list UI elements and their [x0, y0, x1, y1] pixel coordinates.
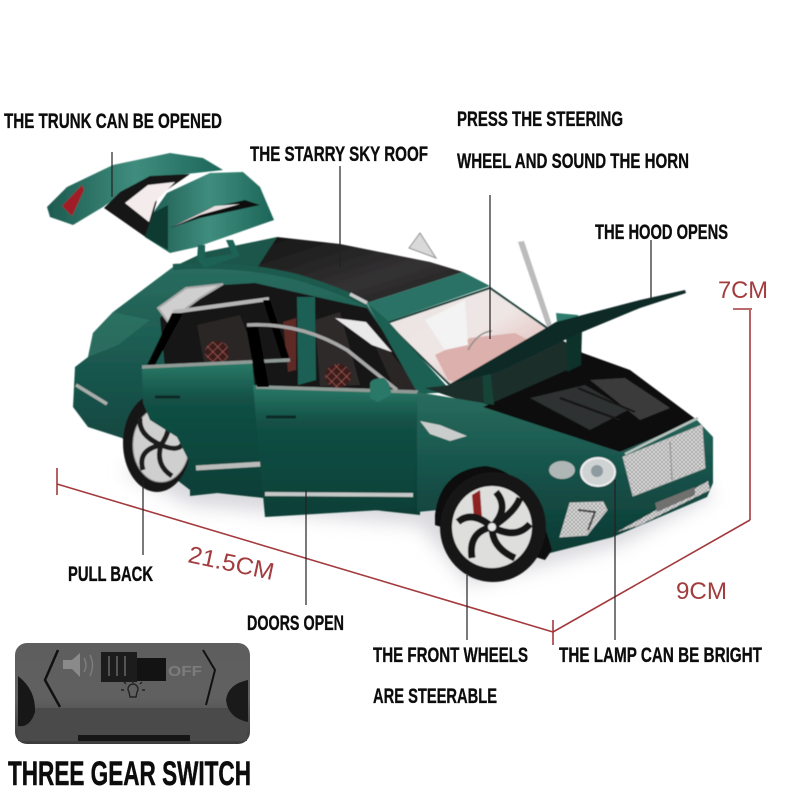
open far door glass [518, 241, 552, 330]
rear window [125, 182, 175, 222]
bay rim [625, 418, 698, 454]
bulb icon [121, 680, 145, 697]
rear window frame [104, 174, 190, 238]
speaker icon [63, 653, 80, 677]
label: pull back: PULL BACK [68, 563, 153, 586]
rear door handle [155, 396, 180, 398]
knob ridges [109, 656, 125, 676]
rear bumper strip [76, 385, 107, 404]
rear door [142, 362, 265, 496]
intake icon [578, 510, 595, 530]
left fog intake [560, 502, 607, 537]
brake caliper [472, 490, 482, 518]
front door handle [266, 416, 296, 418]
small headlamp [549, 461, 575, 479]
hood strut right [566, 330, 582, 372]
dimension: width: 9CM [676, 578, 727, 605]
rear door sill strip [196, 464, 263, 468]
engine cover right [590, 378, 670, 420]
ground shadow [120, 440, 715, 585]
shell shade [145, 205, 168, 250]
open hood [450, 290, 686, 384]
lower ledge [18, 708, 247, 741]
red dimension lines [57, 309, 752, 645]
pink interior [435, 333, 532, 384]
front door window frame [247, 325, 397, 390]
tail light [62, 185, 84, 216]
steering wheel [468, 331, 492, 350]
leader lines [112, 152, 651, 640]
front door sill strip [265, 494, 413, 495]
rear seat quilting [205, 341, 229, 363]
rear quarter window [158, 284, 223, 322]
rear wheel rim [133, 408, 189, 482]
green roof front band [367, 272, 490, 322]
rim spokes [140, 413, 184, 476]
glass highlight [172, 204, 240, 227]
label: roof: THE STARRY SKY ROOF [250, 143, 428, 166]
rear wheel tyre [123, 394, 191, 492]
strut [197, 240, 240, 268]
panel: switch photo [15, 643, 250, 744]
fender vent [420, 421, 467, 441]
label: steering line 1: PRESS THE STEERING [457, 108, 623, 131]
rear door rear pillar [263, 300, 290, 360]
dimension: height: 7CM [718, 277, 768, 304]
front door belt trim [256, 387, 418, 392]
illustration: green model car [47, 153, 713, 582]
lamp centre [591, 465, 603, 477]
tailgate outer skin [47, 153, 223, 225]
hood strut left [482, 368, 494, 405]
tailgate shell [145, 172, 274, 253]
cabin interior [160, 283, 425, 392]
left circle [18, 676, 35, 726]
upper door far side [409, 233, 436, 258]
white window gap [335, 318, 392, 352]
grille [623, 425, 705, 496]
label: trunk: THE TRUNK CAN BE OPENED [4, 110, 222, 133]
sound waves [84, 655, 92, 676]
b-pillar [297, 297, 316, 385]
rail highlight [350, 294, 367, 303]
rear door belt [142, 360, 290, 367]
white seat reflection [425, 300, 468, 350]
cowl under windshield [425, 333, 582, 408]
hub [488, 522, 496, 532]
rear seat [197, 315, 262, 370]
label: steering line 2: WHEEL AND SOUND THE HORN [457, 150, 689, 173]
switch plate [15, 643, 250, 744]
label: doors: DOORS OPEN [247, 612, 344, 635]
engine bay [483, 352, 697, 452]
left bracket [45, 650, 60, 707]
label: hood: THE HOOD OPENS [595, 221, 728, 244]
wheel arch [435, 466, 552, 560]
spokes [458, 492, 530, 558]
number plate [655, 487, 695, 512]
tailgate upper [47, 153, 223, 238]
engine cover left [530, 385, 628, 430]
front wheel rim [452, 486, 532, 568]
engine ridges [560, 388, 635, 420]
engine covers [530, 378, 670, 430]
rim disc [452, 486, 532, 568]
caption: three gear switch: THREE GEAR SWITCH [8, 755, 251, 793]
dimension: length: 21.5CM [186, 541, 276, 586]
front door black pillar [246, 327, 269, 387]
front wheel tyre [440, 472, 546, 582]
glass slit [170, 200, 260, 228]
front body [417, 392, 713, 553]
main headlamp [581, 458, 615, 486]
rear haunch highlight [88, 312, 150, 357]
off text: OFF [168, 663, 202, 680]
rear door frame [142, 299, 290, 367]
lower intake [617, 481, 710, 532]
driver seat [367, 328, 420, 390]
a-pillar [367, 303, 452, 394]
rear door silver top [173, 299, 269, 312]
spoiler roof section [173, 237, 277, 268]
black glass roof [257, 237, 463, 303]
bottom dark [78, 735, 190, 741]
red seat centre [283, 318, 296, 372]
rear door front pillar [147, 313, 183, 365]
roof rail [173, 266, 367, 304]
front seat [315, 312, 360, 386]
front door [253, 385, 417, 517]
right circle [226, 680, 248, 722]
front seat quilting [325, 364, 351, 388]
rim disc [133, 408, 189, 482]
switch knob [101, 652, 137, 682]
windshield [387, 288, 550, 385]
wing mirror [370, 378, 391, 402]
switch slot [102, 658, 166, 681]
hinge [556, 313, 580, 330]
label: front wheels line 2: ARE STEERABLE [373, 685, 497, 708]
rear body [73, 266, 420, 515]
grille centre bar [670, 441, 672, 480]
tailgate lower [145, 172, 274, 268]
right bracket [203, 650, 215, 705]
label: front wheels line 1: THE FRONT WHEELS [373, 644, 528, 667]
